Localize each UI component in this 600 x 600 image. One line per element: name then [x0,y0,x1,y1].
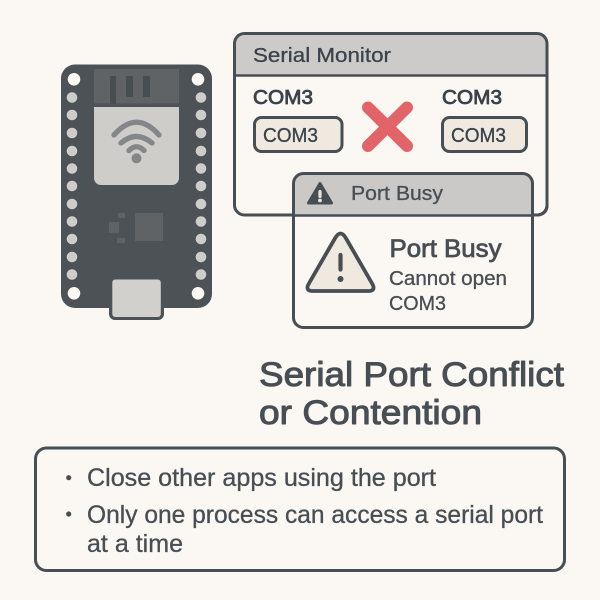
chip and small components [109,213,163,243]
right port label: COM3 [442,87,502,109]
right port field [442,118,526,152]
dialog message line 1: Cannot open [389,268,507,290]
dialog background [294,174,532,328]
bullet: one process at a time [66,501,543,558]
dialog header [293,173,532,215]
title: Serial Port Conflict [259,356,564,394]
icon: large warning triangle [307,234,374,291]
microcontroller board illustration [61,64,212,320]
panel: serial monitor window [234,34,548,215]
wifi module [94,107,179,185]
left port field [254,118,342,152]
dialog header title: Port Busy [351,183,443,205]
dialog message line 2: COM3 [389,293,446,315]
right pin pads [196,92,206,280]
USB connector housing [109,270,164,320]
dialog message heading: Port Busy [390,235,502,263]
bullet: one process at a time: at a time [87,530,183,558]
window title: Serial Monitor [253,44,391,67]
panel: advice box [36,448,564,570]
right port field: COM3 [451,125,506,147]
mounting holes [68,73,204,300]
left port label: COM3 [253,87,313,109]
title: or Contention [259,394,482,432]
window frame [234,34,547,215]
bullet: one process at a time: Only one process can access a serial port [87,501,543,529]
USB connector [112,280,161,317]
board body [61,64,212,308]
panel: port busy dialog [292,173,547,328]
advice box frame [36,448,564,570]
window header [234,34,547,75]
icon: wifi [114,122,159,163]
left pin pads [67,92,77,280]
dialog frame [294,174,532,328]
antenna area [94,69,179,104]
icon: small warning triangle [308,184,332,203]
icon: red X [368,108,407,146]
left port field: COM3 [263,125,318,147]
title [259,356,564,432]
bullet: close other apps: Close other apps using the port [87,464,436,492]
serial window right border overlap [532,190,547,215]
